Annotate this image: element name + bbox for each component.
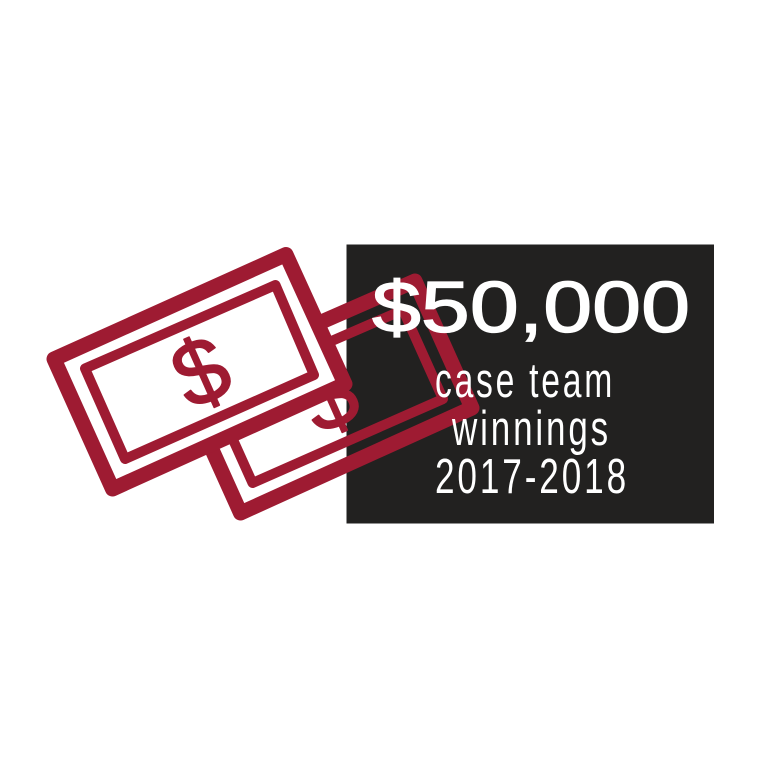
icon: front banknote [54, 254, 345, 489]
text block: caption: winnings [451, 402, 611, 456]
text block: caption [435, 354, 629, 504]
icon: front banknote: $ [157, 315, 245, 429]
icon: back banknote [182, 281, 472, 513]
icon: back banknote: $ [285, 340, 373, 454]
text block: caption: 2017-2018 [435, 450, 629, 504]
text block: caption: case team [435, 354, 615, 408]
heading: prize amount: $50,000 [372, 268, 690, 348]
panel: black background [346, 244, 714, 524]
